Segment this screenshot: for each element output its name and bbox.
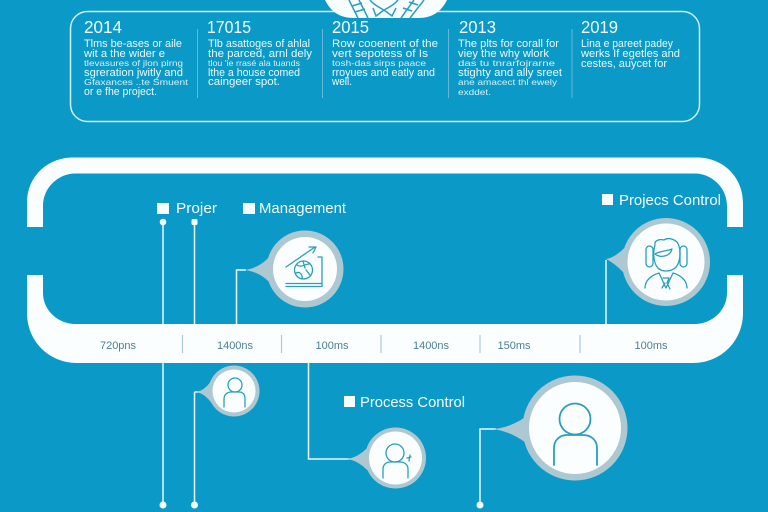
duration scale: 1400ns [217, 340, 254, 352]
column: 2015: 2015 [332, 17, 369, 37]
column: 2014: sgreration jwitly and [84, 67, 183, 79]
column: 2013: stighty and ally sreet [458, 67, 562, 79]
column: 2015: tosh-das sirps paace [332, 58, 426, 68]
column: 2015: rroyues and eatly and [332, 67, 435, 79]
column: 17015: Tlb asattoges of ahlal [208, 38, 310, 50]
column: 2019: cestes, auycet for [581, 58, 667, 70]
callout: small person [194, 366, 260, 416]
column: 2015 [331, 17, 438, 88]
callout: large person [476, 376, 628, 508]
column: 2019: werks If egetles and [580, 48, 680, 60]
column: 2013: exddet. [458, 87, 491, 97]
duration scale [100, 335, 668, 353]
connector: Projer line [160, 219, 166, 508]
column: 2014 [83, 17, 189, 98]
column: 2019: 2019 [581, 17, 618, 37]
column: 2013: ane amacect thl ewely [458, 77, 558, 87]
column: 17015: tlou 'ie rrasé ala tuands [208, 58, 300, 68]
icon: person with mark [383, 444, 411, 478]
column: 2013: The plts for corall for [458, 38, 559, 50]
callout: chart and globe [236, 230, 344, 324]
column: 2019 [580, 17, 680, 70]
column: 17015: lthe a house comed [208, 67, 300, 79]
label: Projer [157, 201, 217, 217]
icon: top seal badge [325, 0, 447, 18]
callout: headset manager [606, 218, 710, 324]
column: 17015: caingeer spot. [208, 76, 280, 88]
column: 2014: tlevasures of jlon pirng [84, 58, 183, 68]
column: 2014: Gfaxances ..te Smuent [84, 77, 189, 87]
column: 17015: the parced, arnl dely [208, 48, 313, 60]
column: 2014: Tlms be-ases or aile [84, 38, 182, 50]
column: 17015 [207, 17, 313, 88]
callout: process person [308, 363, 426, 488]
icon: person with headset [645, 239, 687, 289]
label: Management: Management [259, 201, 346, 217]
timeline track frame [27, 158, 743, 363]
column: 2014: 2014 [84, 17, 122, 37]
column: 2014: wit a the wider e [83, 48, 165, 60]
duration scale: 720pns [100, 340, 137, 352]
duration scale: 100ms [634, 340, 668, 352]
column: 2013: 2013 [459, 17, 496, 37]
column: 2013: viey the why wlork [458, 48, 549, 60]
duration scale: 1400ns [413, 340, 450, 352]
column: 2015: Row cooenent of the [332, 38, 438, 50]
column: 2015: vert sepotess of Is [332, 48, 429, 60]
duration scale: 150ms [497, 340, 531, 352]
label: Projecs Control: Projecs Control [619, 193, 721, 209]
duration scale: 100ms [315, 340, 349, 352]
label: Projer: Projer [176, 201, 217, 217]
column: 2015: well. [331, 76, 352, 88]
column: 17015: 17015 [207, 17, 251, 37]
connector: Management line [191, 219, 198, 508]
column: 2014: or e fhe project. [84, 86, 157, 98]
label: Process Control: Process Control [360, 395, 465, 411]
column: 2019: Lina e pareet padey [581, 38, 673, 50]
icon: chart with globe [286, 247, 322, 286]
panel: yearly summary [70, 12, 700, 122]
icon: large person [554, 404, 597, 465]
column: 2013: das tu tnrarfojrarne [458, 58, 555, 68]
column: 2013 [458, 17, 562, 97]
icon: person [224, 378, 245, 407]
